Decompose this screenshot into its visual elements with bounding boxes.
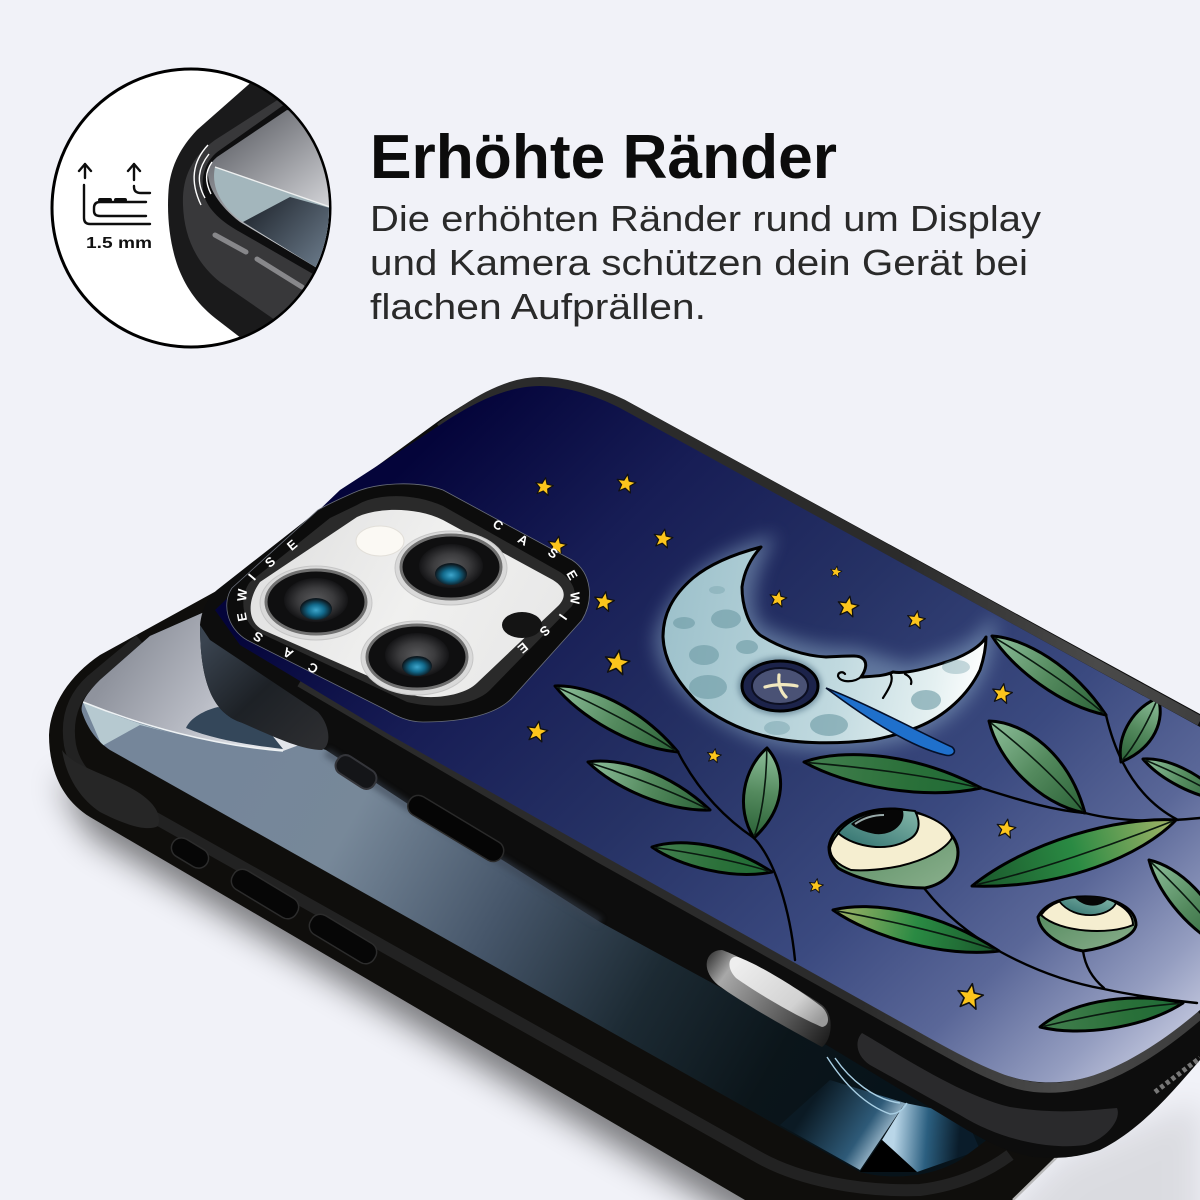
- ring lettering: E: [515, 639, 531, 657]
- front phone corner bumper: [857, 1033, 1118, 1146]
- side button large: [404, 792, 507, 865]
- ring lettering: S: [262, 553, 278, 571]
- body text: [370, 198, 1041, 327]
- front phone translucent bumper: [200, 625, 328, 750]
- heading: Erhöhte Ränder: [370, 123, 837, 192]
- ring lettering: E: [563, 567, 581, 583]
- back phone side buttons: [168, 834, 380, 967]
- back phone bumper: [62, 750, 159, 828]
- callout: raised edge detail circle: [52, 69, 340, 347]
- icon: raised edge diagram: [79, 164, 150, 224]
- translucent lower edge of front case: [326, 752, 600, 922]
- ring lettering: A: [515, 531, 531, 549]
- microphone hole: [502, 612, 542, 638]
- ring lettering: W: [568, 592, 582, 605]
- small eye flower: [1038, 896, 1136, 951]
- ring lettering: A: [280, 644, 296, 662]
- ring lettering: S: [545, 544, 561, 562]
- front phone case body: [200, 379, 1200, 1158]
- back phone rim highlight: [69, 640, 1010, 1190]
- ring lettering: S: [537, 622, 553, 640]
- ring lettering: C: [305, 659, 321, 677]
- body text: flachen Aufprällen.: [370, 286, 706, 327]
- vine stems: [678, 715, 1200, 1003]
- ring lettering: I: [245, 571, 259, 583]
- back phone shadow: [58, 780, 830, 1200]
- back phone: [49, 560, 1100, 1200]
- speaker holes: [1155, 1058, 1200, 1092]
- front phone corner shadow: [1010, 1100, 1200, 1200]
- crescent moon: [663, 547, 986, 743]
- large eye flower: [829, 809, 958, 888]
- moon face lines: [838, 672, 911, 698]
- artwork: [200, 370, 1200, 1090]
- lens: bottom: [361, 621, 473, 695]
- label: 1.5 mm: 1.5 mm: [86, 235, 152, 252]
- blue needle: [826, 688, 954, 755]
- back phone screen: [82, 612, 986, 1176]
- lens: left: [260, 566, 372, 640]
- ring lettering: [234, 516, 583, 677]
- flash: [356, 526, 404, 556]
- ring lettering: S: [250, 628, 266, 646]
- charging port: [707, 950, 831, 1047]
- stars: [525, 473, 1017, 1010]
- moon glow: [663, 547, 986, 743]
- phone corner close-up: [168, 84, 329, 337]
- front phone rim: [300, 382, 1200, 1088]
- ring lettering: W: [234, 588, 250, 602]
- camera ring: [227, 484, 589, 722]
- body text: Die erhöhten Ränder rund um Display: [370, 198, 1041, 239]
- ring lettering: I: [556, 611, 570, 623]
- ring lettering: C: [490, 516, 506, 534]
- side switch: [332, 752, 380, 792]
- front phone: [200, 370, 1200, 1158]
- button eye: [738, 657, 822, 715]
- moon craters: [673, 586, 970, 736]
- lens: top right: [395, 531, 507, 605]
- leaves: [549, 624, 1200, 1040]
- ring lettering: E: [234, 611, 250, 623]
- back phone case frame: [49, 560, 1100, 1200]
- ring lettering: E: [284, 536, 300, 554]
- body text: und Kamera schützen dein Gerät bei: [370, 242, 1028, 283]
- camera module window: [251, 510, 564, 697]
